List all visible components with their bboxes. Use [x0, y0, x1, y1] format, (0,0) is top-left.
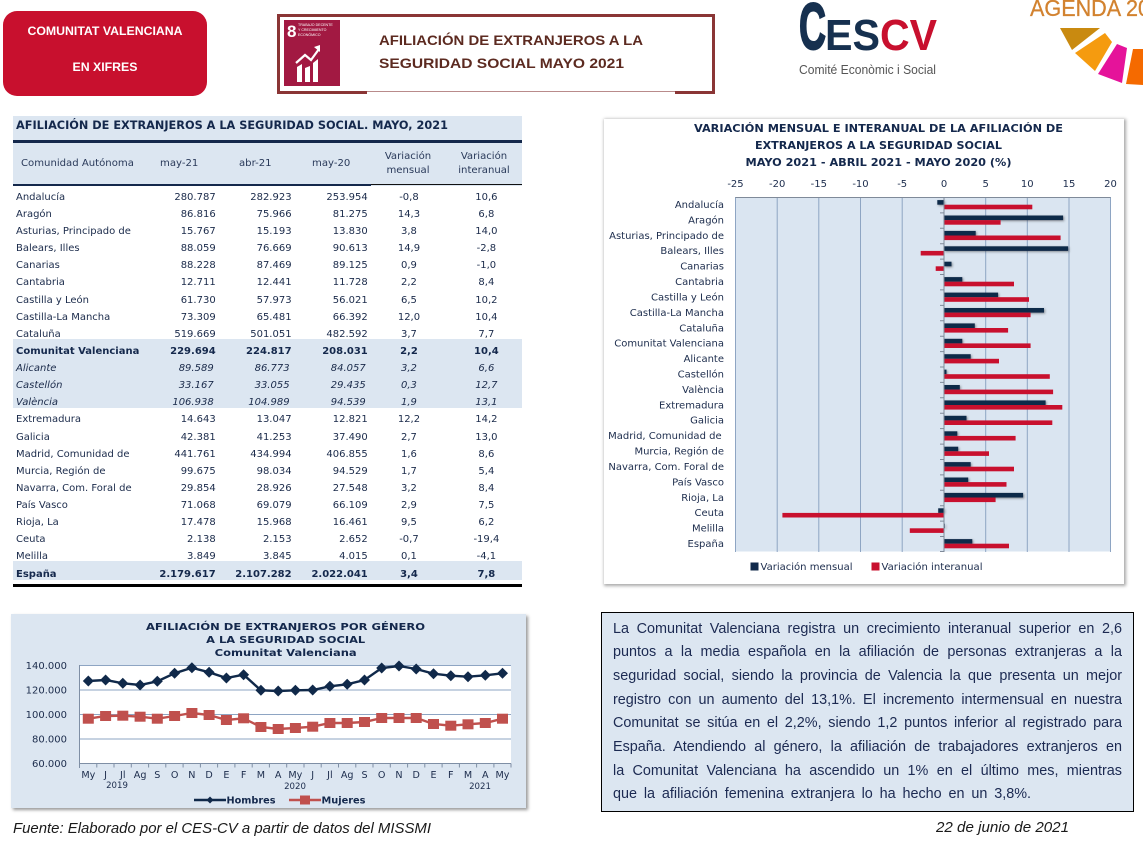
category labels: Castellón [678, 368, 724, 380]
line chart legend: Hombres [226, 796, 276, 806]
table rows: 441.761 [174, 449, 216, 460]
table rows: 88.059 [181, 243, 216, 254]
table rows: 13,1 [475, 397, 498, 408]
axis labels: top: 15 [1063, 179, 1075, 190]
table rows: 9,5 [401, 517, 417, 528]
x axis labels: Ag [341, 770, 354, 781]
table rows: 76.669 [257, 243, 292, 254]
zero axis [940, 197, 944, 552]
category labels: Murcia, Región de [634, 446, 724, 458]
table rows: 37.490 [333, 432, 368, 443]
table rows: 3,8 [401, 226, 417, 237]
x axis labels: My [496, 770, 510, 781]
table rows: Castellón [16, 380, 62, 391]
table rows: 2,2 [400, 346, 418, 357]
table rows: 8,4 [478, 483, 494, 494]
x axis labels: E [430, 770, 437, 781]
table rows: -1,0 [477, 260, 496, 271]
table rows: Castilla-La Mancha [16, 312, 110, 323]
icon: SDG 8: TRABAJO DECENTE [298, 23, 333, 27]
table rows: Galicia [16, 432, 50, 443]
panel: bar chart [604, 119, 1124, 584]
table rows: 208.031 [322, 346, 368, 357]
table rows: 87.469 [257, 260, 292, 271]
table rows: 15.767 [181, 226, 216, 237]
table rows: Ceuta [16, 534, 46, 545]
table rows: 14.643 [181, 414, 216, 425]
category labels: Ceuta [694, 508, 724, 519]
bar chart legend: Variación mensual [760, 561, 852, 573]
table rows: 0,1 [401, 551, 417, 562]
table rows [16, 192, 499, 580]
table header: Comunidad Autónoma [21, 158, 134, 169]
table rows: 65.481 [257, 312, 292, 323]
table rows: 14,3 [398, 209, 420, 220]
x axis labels: M [464, 770, 472, 781]
x axis labels: S [154, 770, 160, 781]
table rows: Madrid, Comunidad de [16, 449, 130, 460]
logo: CES-CV [799, 0, 938, 77]
category labels: Extremadura [659, 400, 724, 411]
x axis labels: F [448, 770, 454, 781]
y axis labels [26, 661, 67, 770]
bar chart title: EXTRANJEROS A LA SEGURIDAD SOCIAL [755, 140, 1002, 152]
table rows: 2.107.282 [235, 569, 292, 580]
text box: summary: que la afiliación femenina extranjera lo ha hecho en un 3,8%. [613, 786, 1031, 802]
x axis labels: D [413, 770, 420, 781]
table rows: 86.773 [255, 363, 290, 374]
table rows: Aragón [16, 209, 52, 220]
table rows: 84.057 [331, 363, 366, 374]
table header: abr-21 [239, 158, 272, 169]
bars: variación mensual [937, 200, 1068, 544]
table rows: 12.711 [181, 277, 216, 288]
table rows: 33.055 [255, 380, 290, 391]
table rows: Murcia, Región de [16, 466, 106, 477]
x axis labels: 2020 [284, 782, 306, 792]
source note: Fuente: Elaborado por el CES-CV a partir de datos del MISSMI [13, 820, 431, 837]
table rows: 12,7 [475, 380, 498, 391]
table rows: 1,9 [401, 397, 417, 408]
axis labels: top: -10 [852, 179, 869, 190]
table rows: 94.539 [331, 397, 366, 408]
table rows: 3,2 [401, 483, 417, 494]
table rows: Cantabria [16, 277, 65, 288]
table rows: 42.381 [181, 432, 216, 443]
axis labels: top: -25 [727, 179, 744, 190]
table rows: 75.966 [257, 209, 292, 220]
y axis labels: 80.000 [32, 734, 67, 746]
line chart legend [194, 796, 366, 806]
line chart legend: Mujeres [322, 796, 366, 806]
bars: variación interanual [782, 205, 1062, 548]
table rows: Balears, Illes [16, 243, 80, 254]
table header [13, 140, 522, 186]
table rows: España [16, 569, 57, 580]
table rows: 14,0 [475, 226, 498, 237]
badge: Comunitat Valenciana en xifres [3, 11, 207, 96]
table rows: 66.109 [333, 500, 368, 511]
category labels: País Vasco [672, 476, 724, 488]
date: 22 de junio de 2021 [936, 819, 1069, 836]
table rows: Canarias [16, 260, 60, 271]
table rows: 10,4 [474, 346, 499, 357]
category labels: Balears, Illes [660, 246, 724, 257]
category labels: Melilla [692, 524, 724, 535]
x axis labels: My [81, 770, 96, 781]
table rows: 13,0 [475, 432, 498, 443]
table rows: 3.849 [187, 551, 216, 562]
table rows: 29.854 [181, 483, 216, 494]
table rows: 519.669 [174, 329, 216, 340]
x axis labels: Jl [326, 770, 333, 781]
title box [277, 14, 715, 94]
table rows: 13.047 [257, 414, 292, 425]
table rows: 69.079 [257, 500, 292, 511]
table rows: 71.068 [181, 500, 216, 511]
table rows: 2.179.617 [159, 569, 216, 580]
table rows: 12.821 [333, 414, 368, 425]
x axis labels [81, 770, 510, 792]
logo: CES-CV: ES [825, 11, 880, 60]
table header: Variación [461, 151, 507, 162]
category labels: Madrid, Comunidad de [608, 431, 722, 442]
table rows: Alicante [16, 363, 56, 374]
category labels: Rioja, La [681, 493, 724, 504]
table rows: 2,7 [401, 432, 417, 443]
x axis labels: Ag [134, 770, 146, 781]
table rows: 6,2 [478, 517, 494, 528]
table rows: 8,6 [478, 449, 494, 460]
x axis labels: O [171, 770, 179, 781]
table rows: 6,5 [401, 295, 417, 306]
table rows: 8,4 [478, 277, 494, 288]
table rows: 482.592 [326, 329, 368, 340]
table rows: 0,9 [401, 260, 417, 271]
table rows: 90.613 [333, 243, 368, 254]
table rows: 29.435 [331, 380, 366, 391]
category labels: Cataluña [679, 323, 724, 334]
panel: data table [13, 116, 522, 587]
axis labels: top: -20 [769, 179, 785, 190]
table rows: 7,5 [478, 500, 494, 511]
table rows: 1,7 [401, 466, 417, 477]
table rows: 15.193 [257, 226, 292, 237]
text box: summary [601, 612, 1134, 812]
x axis labels: F [241, 770, 246, 781]
table rows: 253.954 [326, 192, 368, 203]
y axis labels: 100.000 [26, 710, 67, 721]
category labels: Castilla-La Mancha [630, 308, 724, 319]
table rows: 16.461 [333, 517, 368, 528]
line chart title: AFILIACIÓN DE EXTRANJEROS POR GÉNERO [146, 620, 425, 633]
axis labels: top: 5 [983, 179, 989, 190]
table rows: 104.989 [248, 397, 290, 408]
table rows: 2,2 [401, 277, 417, 288]
bar chart title: MAYO 2021 - ABRIL 2021 - MAYO 2020 (%) [746, 157, 1012, 169]
table rows: 3,4 [400, 569, 418, 580]
table rows: -0,8 [399, 192, 419, 203]
x axis labels: S [361, 770, 368, 781]
table rows: Cataluña [16, 329, 61, 340]
table rows: 41.253 [257, 432, 292, 443]
x axis labels: N [395, 770, 403, 781]
icon: SDG 8: 8 [287, 22, 296, 41]
x axis labels: M [257, 770, 265, 781]
table rows: València [16, 397, 58, 408]
heading [379, 31, 643, 71]
table rows: 56.021 [333, 295, 368, 306]
table rows: Extremadura [16, 414, 81, 425]
x axis labels: E [223, 770, 229, 781]
table rows: 86.816 [181, 209, 216, 220]
table rows: -0,7 [399, 534, 419, 545]
axis labels: top: 0 [941, 179, 947, 190]
category labels: Galicia [690, 416, 724, 427]
axis labels: top [727, 179, 1117, 190]
table rows: 14,2 [475, 414, 498, 425]
table rows: 81.275 [333, 209, 368, 220]
table rows: 10,2 [475, 295, 498, 306]
category labels: Cantabria [675, 277, 724, 288]
table rows: País Vasco [16, 500, 68, 511]
line chart title [146, 620, 425, 659]
heading: AFILIACIÓN DE EXTRANJEROS A LA [379, 31, 643, 48]
table rows: 7,7 [478, 329, 494, 340]
table rows: 3,2 [401, 363, 417, 374]
text box: summary: La Comunitat Valenciana registra un crecimiento interanual superior en 2,6 [613, 620, 1122, 636]
axis labels: top: -15 [811, 179, 827, 190]
table rows: Castilla y León [16, 295, 89, 306]
table rows: 94.529 [333, 466, 368, 477]
text box: summary: puntos a la media española en la afiliación de personas extranjeras a la [613, 644, 1122, 660]
line chart title: Comunitat Valenciana [215, 648, 357, 659]
table rows: 2.153 [263, 534, 292, 545]
text box: summary: registro con un aumento del 13,1%. El incremento intermensual en nuestra [613, 692, 1122, 708]
plot area and grid [80, 665, 511, 768]
table rows: 61.730 [181, 295, 216, 306]
table rows: 10,4 [475, 312, 498, 323]
category labels: Andalucía [675, 199, 724, 211]
table header: may-20 [312, 158, 350, 169]
logo: CES-CV: CV [880, 11, 938, 60]
icon: SDG 8: Y CRECIMIENTO [298, 28, 327, 32]
x axis labels: D [205, 770, 213, 781]
line: Mujeres [88, 713, 503, 729]
table title band [13, 116, 522, 140]
table rows: 6,6 [478, 363, 494, 374]
x axis labels: My [288, 770, 303, 781]
table rows: Andalucía [16, 192, 65, 203]
table rows: 10,6 [475, 192, 498, 203]
table rows: 12,2 [398, 414, 420, 425]
table rows: 3,7 [401, 329, 417, 340]
table rows: 13.830 [333, 226, 368, 237]
table rows: 17.478 [181, 517, 216, 528]
table rows: 12.441 [257, 277, 292, 288]
x axis labels: O [378, 770, 386, 781]
table rows: 2.022.041 [311, 569, 368, 580]
category labels: Aragón [688, 214, 724, 226]
table rows: Comunitat Valenciana [16, 346, 139, 357]
table rows: 106.938 [172, 397, 214, 408]
table rows: 15.968 [257, 517, 292, 528]
x axis labels: 2019 [106, 781, 128, 791]
table rows: 57.973 [257, 295, 292, 306]
x axis labels: N [188, 770, 195, 781]
y axis labels: 60.000 [32, 759, 67, 770]
logo: CES-CV: Comité Econòmic i Social [799, 62, 936, 77]
badge: Comunitat Valenciana en xifres: COMUNITAT VALENCIANA [27, 24, 183, 38]
icon: SDG 8 [284, 20, 340, 86]
table rows: -2,8 [477, 243, 496, 254]
y axis labels: 140.000 [26, 661, 67, 672]
axis labels: top: 20 [1104, 179, 1117, 190]
table rows: 99.675 [181, 466, 216, 477]
heading: SEGURIDAD SOCIAL MAYO 2021 [379, 55, 624, 71]
bar chart title: VARIACIÓN MENSUAL E INTERANUAL DE LA AFILIACIÓN DE [694, 122, 1063, 135]
table rows: 280.787 [174, 192, 216, 203]
table rows: Rioja, La [16, 517, 59, 528]
table rows: 66.392 [333, 312, 368, 323]
x axis labels: A [482, 770, 489, 781]
category labels: Asturias, Principado de [609, 231, 724, 242]
table rows: 88.228 [181, 260, 216, 271]
table header: mensual [386, 165, 430, 176]
text box: summary: seguridad social, siendo la provincia de Valencia la que presenta un mejor [613, 668, 1122, 684]
table rows: 2.138 [187, 534, 216, 545]
text box: summary: España. Atendiendo al género, la afiliación de trabajadores extranjeros en [613, 739, 1122, 755]
table rows: 73.309 [181, 312, 216, 323]
table header: interanual [458, 165, 510, 176]
text box: summary: Comunitat se sitúa en el 2,2%, siendo 1,2 puntos inferior al registrado para [613, 715, 1122, 731]
y axis labels: 120.000 [26, 686, 67, 696]
line: Hombres [88, 666, 503, 691]
table rows: 33.167 [179, 380, 214, 391]
panel: line chart [11, 614, 526, 808]
category labels: Comunitat Valenciana [614, 339, 724, 350]
table rows: 434.994 [250, 449, 292, 460]
x axis labels: J [310, 770, 314, 781]
table rows: 7,8 [478, 569, 495, 580]
table rows: Asturias, Principado de [16, 226, 131, 237]
table rows: Navarra, Com. Foral de [16, 483, 132, 494]
table rows: 89.589 [179, 363, 214, 374]
table rows: Melilla [16, 551, 48, 562]
table rows: 3.845 [263, 551, 292, 562]
badge: Comunitat Valenciana en xifres: EN XIFRES [73, 60, 137, 74]
category labels: Navarra, Com. Foral de [608, 462, 724, 473]
table header: Variación [385, 151, 431, 162]
x axis labels: A [275, 770, 282, 781]
category labels: España [688, 539, 724, 550]
table rows: 1,6 [401, 449, 417, 460]
line chart title: A LA SEGURIDAD SOCIAL [206, 635, 366, 646]
category labels [608, 199, 724, 550]
axis labels: top: 10 [1021, 179, 1034, 190]
table rows: 0,3 [401, 380, 417, 391]
x axis labels: J [103, 770, 107, 781]
table rows: 12,0 [398, 312, 420, 323]
table rows: 2,9 [401, 500, 417, 511]
bar chart title [694, 122, 1063, 169]
axis labels: top: -5 [897, 179, 907, 190]
table rows: 4.015 [339, 551, 368, 562]
table rows: 27.548 [333, 483, 368, 494]
table rows: 89.125 [333, 260, 368, 271]
bar chart legend [750, 561, 982, 573]
category labels: Canarias [680, 262, 724, 273]
x axis labels: Jl [119, 770, 126, 781]
table rows: -19,4 [473, 534, 499, 545]
table title band: AFILIACIÓN DE EXTRANJEROS A LA SEGURIDAD SOCIAL. MAYO, 2021 [16, 119, 448, 132]
category labels: València [682, 384, 724, 396]
table rows: 229.694 [170, 346, 216, 357]
table rows: 28.926 [257, 483, 292, 494]
logo: Agenda 2030 [1030, 0, 1143, 85]
category labels: Castilla y León [651, 292, 724, 304]
table rows: 282.923 [250, 192, 292, 203]
bar chart legend: Variación interanual [882, 561, 982, 573]
plot background and grid [736, 197, 1110, 552]
table rows: -4,1 [477, 551, 496, 562]
table rows: 2.652 [339, 534, 368, 545]
x axis labels: 2021 [469, 782, 491, 792]
table rows: 501.051 [250, 329, 292, 340]
table rows: 98.034 [257, 466, 292, 477]
table rows: 6,8 [478, 209, 494, 220]
table rows: 14,9 [398, 243, 420, 254]
text box: summary: la Comunitat Valenciana ha ascendido un 1% en el último mes, mientras [613, 763, 1122, 779]
table rows: 406.855 [326, 449, 368, 460]
icon: SDG 8: ECONÓMICO [298, 32, 321, 37]
table rows: 11.728 [333, 277, 368, 288]
table rows: 224.817 [246, 346, 292, 357]
table header: may-21 [160, 158, 198, 169]
category labels: Alicante [684, 354, 724, 365]
table rows: 5,4 [478, 466, 494, 477]
